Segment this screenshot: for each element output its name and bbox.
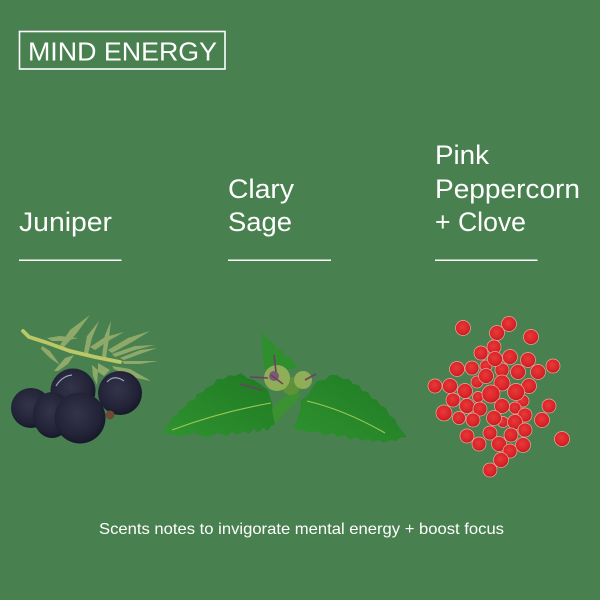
icon: clary sage leaves and bud (163, 332, 407, 443)
icon: pink peppercorns (428, 316, 570, 477)
right leaf (293, 375, 407, 443)
leaf veins (172, 401, 385, 433)
juniper berries (11, 368, 142, 444)
column heading: Clary Sage: Sage (228, 207, 292, 237)
flower buds (282, 377, 300, 395)
column heading: Juniper: Juniper (19, 207, 112, 237)
berry stalk (106, 410, 114, 420)
column heading: Pink Peppercorn + Clove: Pink (435, 140, 490, 170)
caption: Scents notes to invigorate mental energy + boost focus (99, 521, 504, 538)
column heading: Pink Peppercorn + Clove: + Clove (435, 207, 526, 237)
column heading: Pink Peppercorn + Clove (435, 140, 580, 261)
icon: juniper sprig and berries (11, 315, 158, 444)
top leaf (262, 332, 297, 376)
juniper stem (23, 331, 120, 362)
peppercorn pile (428, 316, 570, 477)
juniper needles (41, 315, 158, 385)
lower small leaf (272, 393, 301, 425)
column heading: Juniper (19, 207, 122, 261)
title badge: MIND ENERGY (28, 36, 217, 66)
column heading: Pink Peppercorn + Clove: Peppercorn (435, 174, 580, 204)
left leaf (163, 373, 276, 437)
column heading: Clary Sage: Clary (228, 174, 295, 204)
column heading: Clary Sage (228, 174, 331, 261)
